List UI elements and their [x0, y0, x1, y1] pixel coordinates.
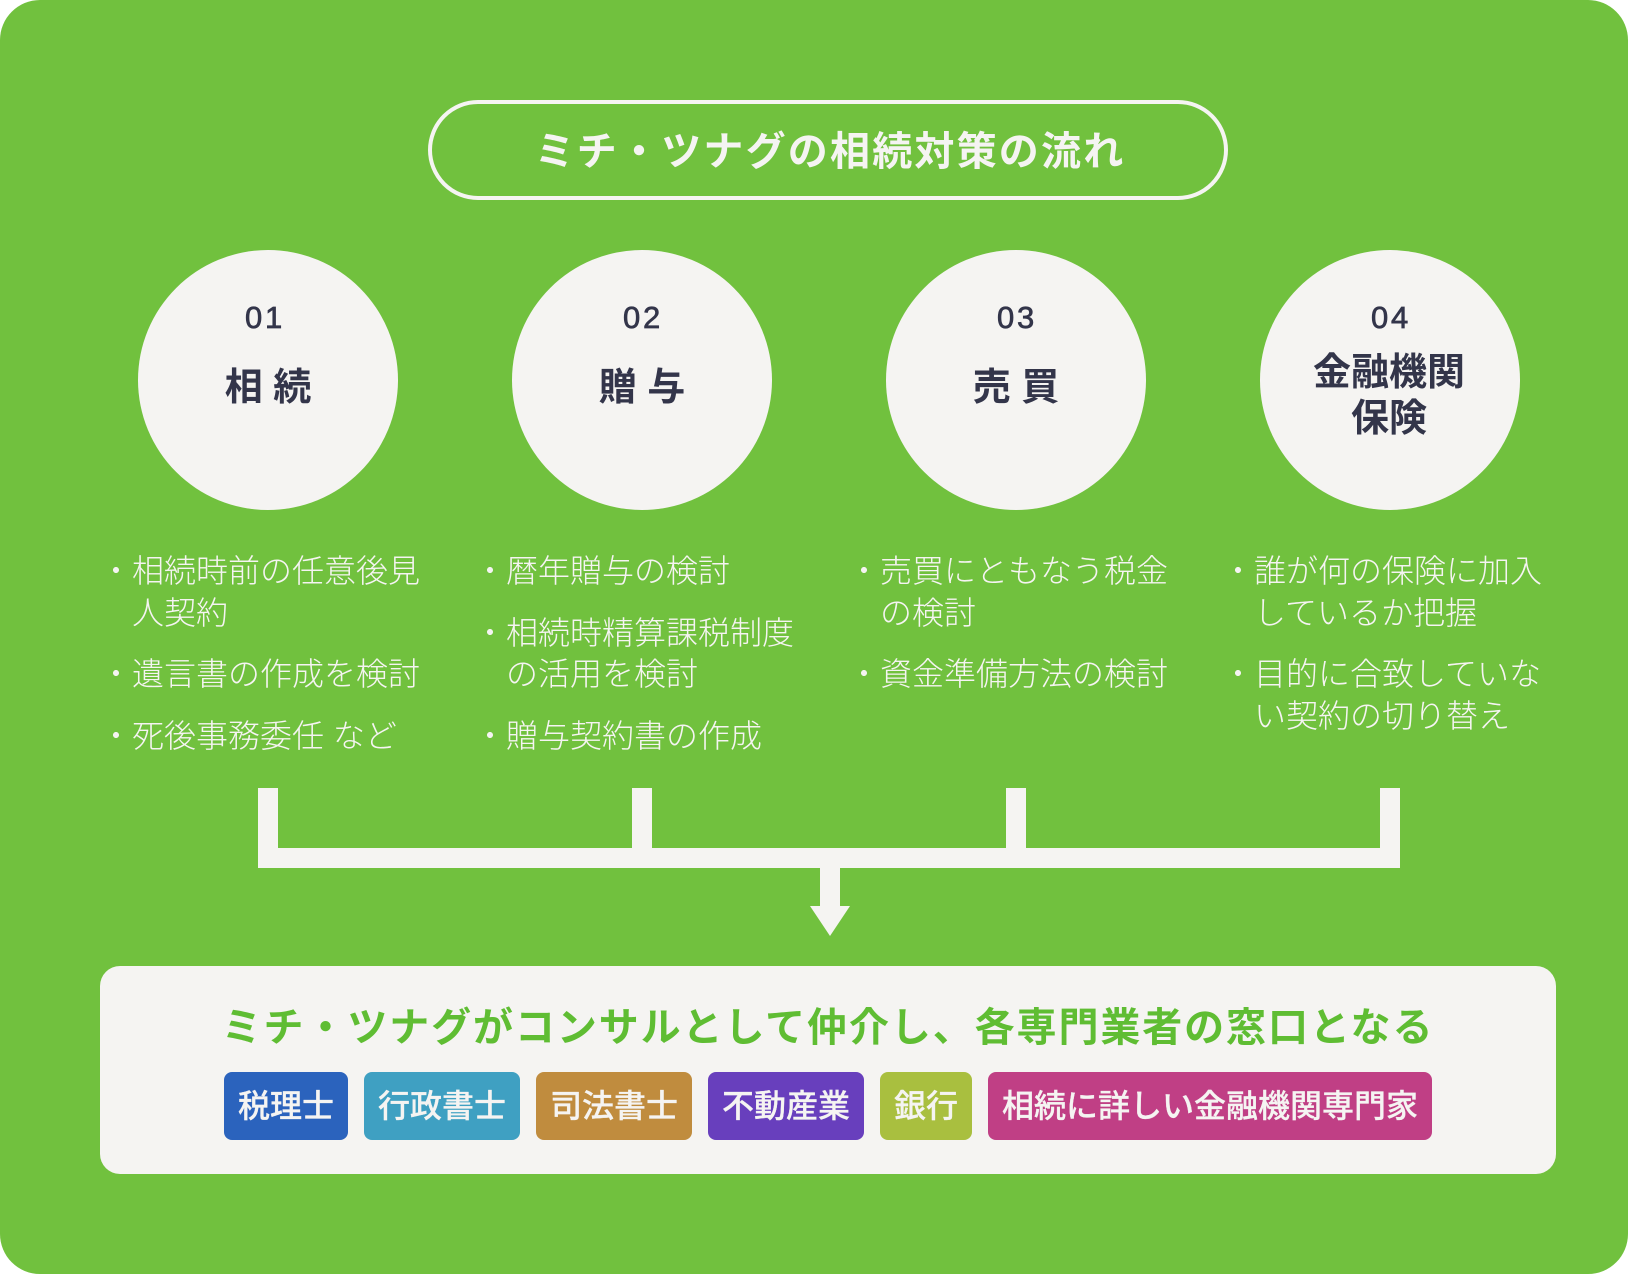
bottom panel: consultant role	[100, 966, 1556, 1174]
arrow: down to panel	[810, 868, 850, 936]
list: 売買	[848, 553, 1168, 692]
number 02: 02	[623, 300, 663, 335]
badge: 不動産業: 不動産業	[722, 1088, 850, 1124]
list: 贈与: 贈与契約書の作成	[506, 718, 762, 754]
heading 金融機関保険: 金融機関	[1313, 352, 1465, 394]
badge: 相続に詳しい金融機関専門家	[988, 1072, 1432, 1140]
badge: 行政書士: 行政書士	[378, 1088, 506, 1124]
circle 02: 贈与	[512, 250, 772, 510]
list: 相続: 相続時前の任意後見	[132, 553, 420, 589]
text: ・	[1222, 553, 1254, 589]
badge: 税理士: 税理士	[238, 1088, 334, 1124]
badge: 銀行: 銀行	[894, 1088, 958, 1124]
list: 売買: 資金準備方法の検討	[880, 656, 1168, 692]
list: 贈与	[474, 553, 794, 754]
heading 贈与: 贈 与	[599, 367, 685, 409]
number 03: 03	[997, 300, 1037, 335]
text: ・	[474, 718, 506, 754]
text: ・	[100, 553, 132, 589]
text: ・	[848, 656, 880, 692]
list: 金融機関保険: 誰が何の保険に加入	[1254, 553, 1542, 589]
list: 相続	[100, 553, 420, 754]
list: 金融機関保険: しているか把握	[1254, 594, 1477, 630]
text: ・	[1222, 656, 1254, 692]
title: ミチ・ツナグの相続対策の流れ	[535, 130, 1125, 174]
badge: 不動産業	[708, 1072, 864, 1140]
list: 売買: の検討	[880, 594, 976, 630]
text: ・	[100, 718, 132, 754]
text: ・	[100, 656, 132, 692]
list: 金融機関保険	[1222, 553, 1542, 734]
text: ・	[474, 615, 506, 651]
badge: 相続に詳しい金融機関専門家: 相続に詳しい金融機関専門家	[1002, 1088, 1418, 1124]
list: 金融機関保険: 目的に合致していな	[1254, 656, 1541, 692]
number 04: 04	[1371, 300, 1411, 335]
number 01: 01	[245, 300, 285, 335]
badge: 銀行	[880, 1072, 972, 1140]
badge: 行政書士	[364, 1072, 520, 1140]
heading 金融機関保険	[1313, 352, 1465, 440]
badge: 司法書士: 司法書士	[550, 1088, 678, 1124]
text: ・	[474, 553, 506, 589]
badge: 司法書士	[536, 1072, 692, 1140]
bracket connector joining the four columns	[258, 788, 1400, 868]
list: 売買: 売買にともなう税金	[880, 553, 1168, 589]
panel heading: ミチ・ツナグがコンサルとして仲介し、各専門業者の窓口となる	[222, 1006, 1434, 1050]
list: 贈与: の活用を検討	[506, 656, 698, 692]
text: ・	[848, 553, 880, 589]
list: 金融機関保険: い契約の切り替え	[1254, 698, 1510, 734]
circle 01: 相続	[138, 250, 398, 510]
title pill outline	[428, 100, 1228, 200]
heading 相続: 相 続	[225, 367, 311, 409]
list: 贈与: 暦年贈与の検討	[506, 553, 730, 589]
circle 03: 売買	[886, 250, 1146, 510]
list: 相続: 人契約	[132, 594, 228, 630]
heading 売買: 売 買	[973, 367, 1059, 409]
heading 金融機関保険: 保険	[1351, 398, 1427, 440]
list: 相続: 遺言書の作成を検討	[132, 656, 420, 692]
badge: 税理士	[224, 1072, 348, 1140]
circle 04: 金融機関保険	[1260, 250, 1520, 510]
list: 相続: 死後事務委任 など	[132, 718, 397, 754]
list: 贈与: 相続時精算課税制度	[506, 615, 794, 651]
